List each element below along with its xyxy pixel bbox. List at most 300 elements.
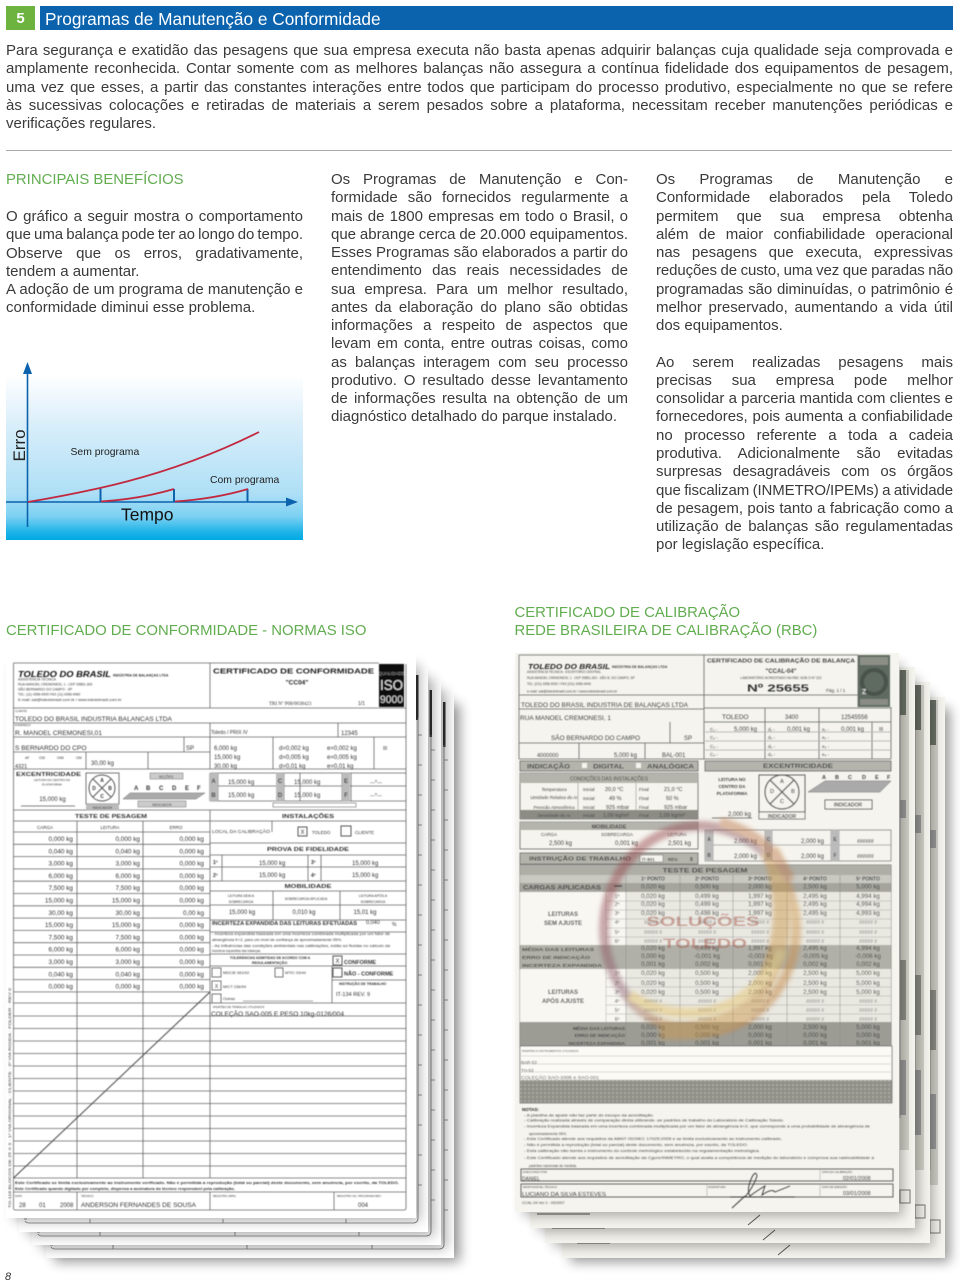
front sheet: conformity certificate: 0,000 kg — [179, 947, 204, 954]
text: column 2: diagnóstico detalhado do parque instalado. — [331, 408, 617, 425]
front sheet: calibration certificate: "CCAL-04" — [765, 669, 797, 675]
text: column 2: que abrange cerca de 20.000 equipamentos. — [331, 226, 628, 243]
front sheet: calibration certificate: 2,500 kg — [803, 884, 827, 890]
front sheet: calibration certificate: 5,000 kg — [856, 980, 880, 987]
front sheet: conformity certificate: A — [100, 778, 104, 784]
front sheet: conformity certificate: TOLEDO DO BRASIL — [18, 669, 111, 679]
front sheet: calibration certificate: 1,997 kg — [748, 893, 772, 900]
front sheet: calibration certificate: 1º PONTO — [641, 876, 665, 882]
front sheet: conformity certificate: 15,000 kg — [112, 898, 140, 904]
front sheet: calibration certificate: 0,020 kg — [641, 1024, 665, 1031]
front sheet: calibration certificate: SOBRECARGA — [601, 832, 633, 837]
front sheet: conformity certificate: 30,00 kg — [214, 764, 237, 770]
front sheet: conformity certificate: REGISTRO NO. PROGRAMA REV. — [337, 1194, 382, 1198]
front sheet: calibration certificate: D — [767, 853, 771, 859]
front sheet: conformity certificate: 0,000 kg — [179, 959, 204, 966]
front sheet: conformity certificate: CARGA — [37, 825, 53, 830]
front sheet: conformity certificate: III — [383, 746, 387, 752]
front sheet: calibration certificate: ##### # — [751, 939, 769, 945]
text: column 3: utilização de balanças são regulamentadas — [656, 518, 953, 535]
text: column 3: reduções de custo, uma vez que paradas não — [656, 262, 953, 279]
front sheet: conformity certificate: TO-118 BLOCOS DE 25 X 3 · 1ª VIA ORIGINAL · CLIENTE · 2ª VIA RIGIDA · FOLDER · REV 0 — [8, 988, 12, 1208]
front sheet: conformity certificate: ERRO — [169, 825, 183, 830]
front sheet: conformity certificate: 6,000 kg — [115, 947, 140, 954]
front sheet: calibration certificate: 49 % — [609, 796, 622, 802]
front sheet: calibration certificate: CONDIÇÕES DAS INSTALAÇÕES — [570, 776, 649, 782]
front sheet: calibration certificate: 0,020 kg — [641, 945, 665, 952]
front sheet: calibration certificate: - A planilha de ajuste não faz parte do escopo da acreditação. — [524, 1114, 654, 1118]
front sheet: calibration certificate: ##### # — [806, 939, 824, 945]
front sheet: conformity certificate: C — [278, 779, 283, 785]
text: column 2: levam em conta, entre outras coisas, como — [331, 335, 628, 352]
front sheet: calibration certificate: 5,000 kg — [734, 727, 757, 733]
front sheet: conformity certificate: C — [100, 794, 104, 800]
front sheet: calibration certificate: 5,000 kg — [856, 989, 880, 996]
heading: certificado de conformidade: CERTIFICADO DE CONFORMIDADE - NORMAS ISO — [6, 623, 366, 639]
front sheet: calibration certificate: 0,020 kg — [641, 884, 665, 890]
front sheet: calibration certificate: 21,0 °C — [664, 787, 682, 793]
front sheet: conformity certificate: R. MANOEL CREMONESI,01 — [15, 730, 102, 737]
front sheet: conformity certificate: 3,000 kg — [115, 861, 140, 868]
front sheet: calibration certificate: 2,000 kg — [734, 839, 757, 845]
front sheet: calibration certificate: C₂ - — [710, 735, 718, 740]
front sheet: conformity certificate: Outras — [223, 996, 235, 1001]
front sheet: conformity certificate: % — [392, 922, 397, 928]
front sheet: conformity certificate: CERTIFICADO DE CONFORMIDADE — [213, 668, 374, 676]
front sheet: conformity certificate: d=0,002 kg — [279, 746, 309, 752]
front sheet: calibration certificate: MOBILIDADE — [592, 824, 627, 830]
front sheet: calibration certificate: ##### # — [644, 999, 662, 1005]
front sheet: calibration certificate: 0,499 kg — [695, 893, 719, 900]
front sheet: calibration certificate: d₁ - — [768, 727, 775, 732]
front sheet: calibration certificate: ##### # — [806, 1008, 824, 1014]
front sheet: conformity certificate: OM — [76, 756, 82, 760]
front sheet: conformity certificate: - Incerteza expandida baseada em uma incerteza combinada multiplicada por um fator de — [212, 932, 390, 936]
front sheet: calibration certificate: ##### # — [698, 999, 716, 1005]
front sheet: conformity certificate: Toledo / PRIX IV — [211, 730, 248, 736]
front sheet: calibration certificate: CCAL-04 Ver 2 - 09/2007 — [522, 1201, 565, 1205]
front sheet: conformity certificate: A — [211, 779, 216, 785]
front sheet: calibration certificate: ##### # — [644, 930, 662, 936]
front sheet: calibration certificate: 0,020 kg — [641, 893, 665, 900]
front sheet: calibration certificate: 1,997 kg — [748, 910, 772, 917]
text: column 3: permitem que sua empresa obtenha — [656, 208, 953, 225]
front sheet: calibration certificate: 4º PONTO — [803, 876, 827, 882]
front sheet: conformity certificate: F — [197, 786, 201, 792]
front sheet: calibration certificate: Inicial — [583, 787, 595, 792]
front sheet: calibration certificate: PLATAFORMA — [717, 791, 748, 796]
front sheet: calibration certificate: INDICADOR — [834, 802, 863, 808]
front sheet: calibration certificate: 5º — [615, 1008, 619, 1014]
front sheet: calibration certificate: Inicial — [583, 796, 595, 801]
front sheet: conformity certificate: e=0,01 kg — [327, 764, 354, 770]
front sheet: calibration certificate: INCERTEZA EXPANDIDA — [568, 1041, 626, 1047]
front sheet: calibration certificate: ASSINATURA — [708, 1185, 726, 1189]
front sheet: conformity certificate: OSI — [39, 756, 45, 760]
front sheet: calibration certificate: 0,001 kg — [803, 1040, 827, 1047]
front sheet: conformity certificate: 7,500 kg — [48, 934, 73, 941]
front sheet: conformity certificate: 0,000 kg — [179, 885, 204, 892]
intro paragraph: verificações regulares. — [6, 115, 156, 132]
text: column 3: fornecedores, pois aumenta a confiabilidade — [656, 408, 953, 425]
front sheet: calibration certificate: 4,994 kg — [856, 945, 880, 952]
front sheet: calibration certificate: e₁ - — [822, 727, 829, 732]
front sheet: conformity certificate — [8, 663, 406, 1210]
chart: error over time: Sem programa — [70, 447, 139, 458]
front sheet: calibration certificate: ##### # — [751, 1017, 769, 1023]
front sheet: calibration certificate: RESPONSÁVEL TÉCNICO — [523, 1184, 558, 1189]
section title bar: Programas de Manutenção e Conformidade — [45, 9, 381, 29]
front sheet: conformity certificate: TOLEDO — [312, 830, 331, 835]
front sheet: calibration certificate: 0,500 kg — [695, 980, 719, 987]
front sheet: calibration certificate: Inicial — [583, 813, 595, 818]
front sheet: conformity certificate: PROVA DE FIDELIDADE — [267, 847, 349, 853]
front sheet: calibration certificate: 50 % — [666, 796, 679, 802]
section number badge — [6, 6, 35, 30]
front sheet: calibration certificate: 4º — [615, 999, 619, 1005]
front sheet: conformity certificate: 15,01 kg — [353, 910, 377, 916]
front sheet: calibration certificate: 0,001 kg — [856, 1040, 880, 1047]
text: column 2: sua empresa. Para um melhor resultado, — [331, 281, 628, 298]
front sheet: calibration certificate: ##### # — [698, 920, 716, 926]
front sheet: calibration certificate: 2,495 kg — [803, 910, 827, 917]
front sheet: conformity certificate: F — [344, 793, 348, 799]
front sheet: calibration certificate: DATA DA CALIBRAÇÃO — [822, 1169, 853, 1174]
front sheet: conformity certificate: INSTALAÇÕES — [282, 813, 334, 820]
front sheet: conformity certificate: CLIENTE — [355, 830, 374, 835]
intro paragraph: uma vez que esses, a partir das constantes interações entre todos que participam do processo produtivo, especialmente no que se refere — [6, 79, 953, 96]
front sheet: conformity certificate: 15,000 kg — [45, 922, 73, 929]
front sheet: conformity certificate: E — [344, 779, 348, 785]
front sheet: conformity certificate: 15,000 kg — [259, 861, 285, 867]
front sheet: calibration certificate: PADRÕES E INSTRUMENTOS UTILIZADOS — [522, 1048, 579, 1053]
intro paragraph: amplamente reconhecida. Contar somente com as melhores balanças não assegura a contínua fidelidade dos equipamentos de pesagem, — [6, 60, 953, 77]
front sheet: conformity certificate: d=0,01 kg — [279, 764, 306, 770]
intro paragraph — [6, 42, 953, 132]
front sheet: calibration certificate: Nº 25655 — [747, 684, 810, 694]
front sheet: calibration certificate: Final — [639, 796, 649, 801]
front sheet: calibration certificate: INCERTEZA EXPANDIDA — [522, 963, 603, 969]
front sheet: calibration certificate: d₂ - — [768, 735, 775, 740]
text: column 1: Observe que os erros, gradativamente, — [6, 245, 303, 262]
front sheet: calibration certificate: 0,002 kg — [856, 961, 880, 968]
text: column 3: de pesagem, pois tanto a fabricação como a — [656, 500, 953, 517]
front sheet: conformity certificate: ---*--- — [370, 780, 382, 786]
front sheet: calibration certificate: BAL-001 — [662, 753, 686, 759]
front sheet: calibration certificate: Final — [639, 813, 649, 818]
front sheet: calibration certificate: 5º PONTO — [856, 876, 880, 882]
front sheet: calibration certificate: Pressão Atmosférica — [533, 805, 575, 810]
front sheet: conformity certificate: B — [146, 786, 151, 792]
text: column 3: melhor preservado, aumentando a vida útil — [656, 299, 953, 316]
certificate stack: ISO conformity — [6, 654, 460, 1262]
front sheet: conformity certificate: abrangência K=2, para um nível de confiança de aproximadamente 95%. — [212, 938, 342, 942]
front sheet: calibration certificate: ###### — [857, 839, 874, 845]
front sheet: calibration certificate: 2,000 kg — [748, 989, 772, 996]
front sheet: calibration certificate: ##### # — [698, 930, 716, 936]
front sheet: calibration certificate: -0,005 kg — [802, 953, 828, 960]
front sheet: calibration certificate: 925 mbar — [664, 805, 687, 811]
front sheet: calibration certificate: A — [822, 775, 826, 781]
front sheet: calibration certificate — [519, 655, 893, 1208]
front sheet: conformity certificate: S BERNARDO DO CPO — [15, 745, 86, 752]
intro paragraph: Para segurança e exatidão das pesagens que sua empresa executa não basta apenas adquirir balanças cuja qualidade seja comprovada e — [6, 42, 953, 59]
front sheet: conformity certificate: 30,00 kg — [91, 761, 114, 767]
front sheet: conformity certificate: LEITURA NO CENTRO DA — [34, 778, 70, 782]
front sheet: calibration certificate: 4º — [615, 920, 619, 926]
front sheet: calibration certificate: B — [707, 853, 711, 859]
front sheet: calibration certificate: 3º — [615, 990, 619, 996]
front sheet: conformity certificate: 15,000 kg — [228, 793, 254, 799]
front sheet: conformity certificate: INDICADOR — [93, 806, 113, 810]
front sheet: conformity certificate: MOBILIDADE — [284, 884, 332, 890]
front sheet: calibration certificate: 2,495 kg — [803, 901, 827, 908]
front sheet: calibration certificate: C₃ - — [710, 744, 718, 749]
front sheet: conformity certificate: 12345 — [341, 731, 358, 737]
front sheet: conformity certificate: 0,000 kg — [179, 836, 204, 843]
text: column 2: produtivo. O resultado desse levantamento — [331, 372, 628, 389]
front sheet: calibration certificate: ##### # — [806, 1017, 824, 1023]
text: column 1: que uma balança pode ter ao longo do tempo. — [6, 226, 303, 243]
front sheet: conformity certificate: 7,500 kg — [115, 934, 140, 941]
front sheet: conformity certificate: 3,000 kg — [115, 959, 140, 966]
front sheet: calibration certificate: 3º PONTO — [748, 876, 772, 882]
front sheet: calibration certificate: e₂ - — [822, 735, 829, 740]
text: column 3: Os Programas de Manutenção e — [656, 171, 953, 188]
front sheet: calibration certificate: 0,020 kg — [641, 989, 665, 996]
front sheet: calibration certificate: INSTRUÇÃO DE TRABALHO — [529, 856, 632, 862]
front sheet: calibration certificate: ##### # — [698, 939, 716, 945]
front sheet: calibration certificate: D — [770, 789, 774, 795]
front sheet: calibration certificate: C₁ - — [710, 727, 718, 732]
front sheet: conformity certificate: 0,00 kg — [183, 910, 204, 917]
text: column 3: no processo referente a toda a cadeia — [656, 427, 953, 444]
front sheet: calibration certificate: Inicial — [583, 805, 595, 810]
front sheet: calibration certificate: INDICADOR — [768, 814, 797, 820]
front sheet: conformity certificate: 0,000 kg — [48, 984, 73, 991]
front sheet: conformity certificate: 3,000 kg — [48, 959, 73, 966]
front sheet: calibration certificate: E — [875, 775, 879, 781]
front sheet: calibration certificate: 2,000 kg — [734, 854, 757, 860]
front sheet: calibration certificate: TEL: (011) 4356-9000 / FAX (011) 4356-9446 — [527, 682, 591, 686]
text: column 1: A adoção de um programa de manutenção e — [6, 281, 303, 298]
front sheet: calibration certificate: 2,000 kg — [748, 884, 772, 890]
front sheet: conformity certificate: 15,000 kg — [259, 873, 285, 879]
front sheet: conformity certificate: 0,000 kg — [115, 836, 140, 843]
front sheet: conformity certificate: 0,000 kg — [179, 898, 204, 904]
front sheet: calibration certificate: 0,001 kg — [641, 1040, 665, 1047]
front sheet: calibration certificate: C — [767, 837, 771, 843]
front sheet: conformity certificate: 28 — [19, 1203, 26, 1209]
front sheet: calibration certificate: IT-801 — [642, 857, 655, 862]
front sheet: calibration certificate: ##### # — [806, 930, 824, 936]
front sheet: calibration certificate: 5,000 kg — [856, 884, 880, 890]
front sheet: conformity certificate: LEITURA APÓS A — [359, 893, 388, 898]
front sheet: calibration certificate: 2,000 kg — [801, 854, 824, 860]
front sheet: conformity certificate: D — [172, 786, 177, 792]
front sheet: conformity certificate: 0,000 kg — [48, 836, 73, 843]
front sheet: calibration certificate: 4,994 kg — [856, 901, 880, 908]
heading: certificado de calibração: REDE BRASILEIRA DE CALIBRAÇÃO (RBC) — [514, 623, 817, 639]
intro paragraph: às sucessivas colocações e retiradas de materiais a serem pesados sobre a plataforma, necessitam receber manutenções periódicas e — [6, 97, 953, 114]
front sheet: calibration certificate: 1º — [615, 894, 619, 900]
front sheet: conformity certificate: D — [92, 786, 96, 792]
front sheet: calibration certificate: ##### # — [698, 1017, 716, 1023]
front sheet: calibration certificate: d₄ - — [768, 752, 776, 757]
front sheet: calibration certificate: ##### # — [644, 939, 662, 945]
front sheet: calibration certificate: LEITURA — [667, 832, 687, 837]
front sheet: calibration certificate: 2,500 kg — [803, 989, 827, 996]
front sheet: calibration certificate: -0,001 kg — [694, 953, 720, 960]
front sheet: calibration certificate: 2,000 kg — [801, 839, 824, 845]
text: column 1: conformidade diminui esse problema. — [6, 299, 255, 316]
front sheet: conformity certificate: MDCIE 061/02 — [223, 970, 250, 975]
front sheet: calibration certificate: 2,000 kg — [728, 812, 751, 818]
front sheet: calibration certificate: 2,000 kg — [748, 1024, 772, 1031]
text: column 3: surpresas desagradáveis com os órgãos — [656, 463, 953, 480]
front sheet: calibration certificate: 3º — [615, 911, 619, 917]
front sheet: calibration certificate: TOLEDO — [722, 714, 749, 721]
front sheet: calibration certificate: 1,09 kg/m³ — [603, 813, 629, 819]
front sheet: calibration certificate: REV. — [668, 857, 678, 862]
front sheet: calibration certificate: 0,020 kg — [641, 980, 665, 987]
front sheet: calibration certificate: ##### # — [859, 930, 877, 936]
front sheet: conformity certificate: TRI Nº P08/0038423 — [269, 701, 312, 707]
front sheet: conformity certificate: "CC04" — [286, 680, 308, 686]
front sheet: conformity certificate: C — [159, 786, 164, 792]
front sheet: calibration certificate: -0,006 kg — [855, 953, 881, 960]
text: column 2: Os Programas de Manutenção e Con- — [331, 171, 628, 188]
watermark: soluções toledo: TOLEDO — [663, 935, 747, 951]
front sheet: conformity certificate: 6,000 kg — [115, 873, 140, 880]
front sheet: calibration certificate: ##### # — [644, 920, 662, 926]
front sheet: calibration certificate: e₃ - — [822, 744, 830, 749]
front sheet: calibration certificate: COLEÇÃO SAO-2005 e SAO-001 — [521, 1074, 600, 1080]
front sheet: conformity certificate: d=0,005 kg — [279, 755, 309, 761]
front sheet: calibration certificate: 5,000 kg — [614, 753, 637, 759]
front sheet: conformity certificate: E-mail: sat@toledobrasil.com.br / www.toledobrasil.com.br — [18, 697, 122, 702]
heading: certificado de calibração: CERTIFICADO DE CALIBRAÇÃO — [514, 605, 740, 621]
front sheet: conformity certificate: e=0,002 kg — [327, 746, 357, 752]
front sheet: calibration certificate: 925 mbar — [606, 805, 629, 811]
front sheet: calibration certificate: - Incerteza Expandida baseada em uma incerteza combinada multiplicada por um fator de abrangência k=2, que corresponde a uma probabilidade de abrangência de — [524, 1124, 870, 1128]
front sheet: calibration certificate: 4,993 kg — [856, 910, 880, 917]
front sheet: calibration certificate: 1,997 kg — [748, 945, 772, 952]
front sheet: calibration certificate: 2,500 kg — [549, 841, 572, 847]
text: column 3: Ao serem realizadas pesagens mais — [656, 354, 953, 371]
front sheet: conformity certificate: 30,00 kg — [115, 910, 140, 917]
front sheet: calibration certificate: - Esta calibração não isenta o instrumento do controle metrológico estabelecido na regulamentação metrológica. — [524, 1149, 760, 1153]
front sheet: calibration certificate: CARGA — [541, 832, 557, 837]
front sheet: conformity certificate: 004 — [358, 1203, 369, 1209]
front sheet: calibration certificate: TH-53 — [521, 1068, 534, 1073]
front sheet: conformity certificate: SOBRECARGA APLICADA — [285, 897, 328, 901]
front sheet: conformity certificate: 0,040 kg — [115, 971, 140, 978]
front sheet: conformity certificate: SÃO BERNARDO DO CAMPO - SP — [18, 686, 73, 692]
front sheet: conformity certificate: 0,040 kg — [115, 848, 140, 855]
text: column 3 — [656, 171, 953, 553]
front sheet: calibration certificate: LEITURAS — [548, 912, 578, 918]
front sheet: conformity certificate: QUALIDADE — [378, 671, 405, 676]
front sheet: conformity certificate: 9000 — [380, 694, 403, 706]
front sheet: conformity certificate: 1º — [213, 860, 218, 866]
front sheet: conformity certificate: 6,000 kg — [214, 746, 237, 752]
front sheet: conformity certificate: REGULAMENTAÇÃO: — [252, 960, 288, 965]
front sheet: conformity certificate: TOLERÂNCIAS ADMITIDAS DE ACORDO COM A — [230, 955, 311, 960]
front sheet: calibration certificate: ##### # — [751, 920, 769, 926]
front sheet: conformity certificate: 6,000 kg — [48, 947, 73, 954]
front sheet: conformity certificate: INDICADOR — [152, 803, 172, 807]
front sheet: calibration certificate: 8 — [690, 857, 693, 863]
front sheet: calibration certificate: 2º PONTO — [695, 876, 719, 882]
chart: error over time: Com programa — [210, 475, 280, 486]
front sheet: conformity certificate: DATA — [15, 1194, 22, 1198]
front sheet: calibration certificate: C — [780, 799, 784, 805]
front sheet: calibration certificate: 2,000 kg — [748, 980, 772, 987]
front sheet: calibration certificate: F — [887, 775, 891, 781]
heading: principais benefícios: PRINCIPAIS BENEFÍCIOS — [6, 172, 184, 188]
front sheet: calibration certificate: 0,000 kg — [803, 1032, 827, 1039]
front sheet: conformity certificate: ASSISTÊNCIA TÉCNICA — [18, 676, 57, 682]
text: column 1: tendem a aumentar. — [6, 263, 139, 280]
chart: error over time: Erro — [10, 429, 29, 462]
certificate stack: RBC calibration — [515, 653, 950, 1262]
front sheet: conformity certificate: 15,000 kg — [352, 873, 378, 879]
front sheet: conformity certificate: INCERTEZA EXPANDIDA DAS LEITURAS EFETUADAS — [212, 921, 358, 927]
text: column 1: O gráfico a seguir mostra o comportamento — [6, 208, 303, 225]
front sheet: conformity certificate: 0,040 kg — [48, 848, 73, 855]
text: column 2: Esses Programas são elaborados a partir do — [331, 244, 628, 261]
front sheet: calibration certificate: 2,500 kg — [803, 980, 827, 987]
front sheet: conformity certificate: SOBRECARGA — [229, 900, 254, 904]
front sheet: conformity certificate: 0,000 kg — [179, 861, 204, 868]
front sheet: calibration certificate: aproximadamente 95%. — [529, 1132, 567, 1136]
front sheet: calibration certificate: Final — [639, 787, 649, 792]
front sheet: conformity certificate: 15,000 kg — [214, 755, 240, 761]
front sheet: conformity certificate: LEITURA SEM A — [228, 894, 255, 898]
text: column 3: Conformidade elaborados pela Toledo — [656, 189, 953, 206]
front sheet: conformity certificate: ---*--- — [370, 793, 382, 799]
front sheet: conformity certificate: ANDERSON FERNANDES DE SOUSA — [81, 1203, 196, 1209]
front sheet: calibration certificate: 5,000 kg — [856, 1024, 880, 1031]
front sheet: calibration certificate: 4000000 — [537, 753, 558, 759]
front sheet: calibration certificate: 12545556 — [841, 715, 868, 721]
front sheet: conformity certificate: 0,000 kg — [179, 934, 204, 941]
front sheet: calibration certificate: DIGITAL — [593, 764, 624, 770]
front sheet: calibration certificate: 2,500 kg — [803, 970, 827, 977]
text: column 3: produtiva. Adicionalmente são evitadas — [656, 445, 953, 462]
heading: certificado de calibração — [514, 604, 817, 639]
front sheet: calibration certificate: Densidade do Ar — [537, 813, 571, 818]
front sheet: calibration certificate: MÉDIA DAS LEITURAS — [522, 945, 595, 953]
front sheet: calibration certificate: - Este Certificado atende aos requisitos de acreditação da Cgcre/INMETRO, o qual avalia a competência de medição do laboratório e comprova sua rastreabilidade a — [524, 1156, 874, 1160]
front sheet: calibration certificate: ERRO DE INDICAÇÃO — [522, 954, 590, 961]
front sheet: calibration certificate: 2,500 kg — [803, 1024, 827, 1031]
front sheet: calibration certificate: Temperatura — [541, 787, 567, 792]
front sheet: calibration certificate: 0,001 kg — [615, 841, 638, 847]
front sheet: conformity certificate: E — [185, 786, 189, 792]
front sheet: conformity certificate: COLEÇÃO SAO-005 E PESO 10kg-0126/004 — [211, 1011, 345, 1018]
front sheet: calibration certificate: 0,000 kg — [748, 1032, 772, 1039]
front sheet: conformity certificate: PADRÕES DE TRABALHO UTILIZADOS — [213, 1004, 264, 1009]
front sheet: calibration certificate: III — [879, 727, 883, 733]
front sheet: calibration certificate: ASSISTÊNCIA TÉCNICA - ESCRITÓRIO CENTRAL — [527, 669, 601, 674]
front sheet: conformity certificate: D — [278, 793, 283, 799]
front sheet: conformity certificate: 0,000 kg — [179, 848, 204, 855]
section title bar — [40, 6, 953, 30]
front sheet: conformity certificate: 1/1 — [358, 701, 365, 707]
front sheet: conformity certificate: TEL: (11) 4356-9000 FAX (11) 4356-9460 — [18, 692, 80, 696]
